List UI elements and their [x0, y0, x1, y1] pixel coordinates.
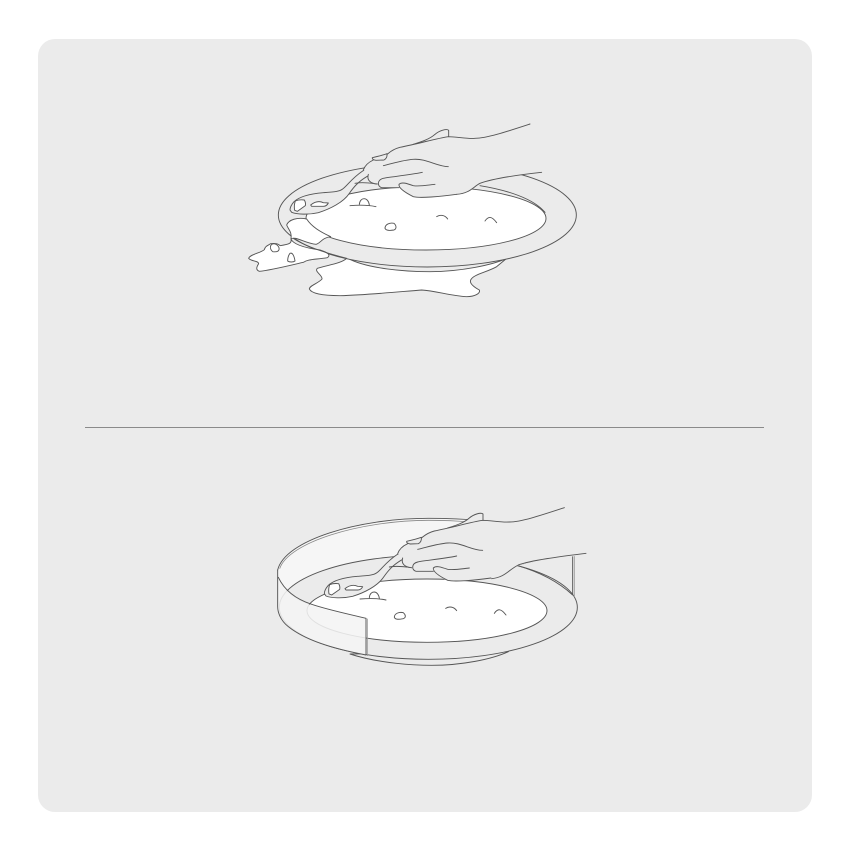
spilled food pieces: [270, 244, 279, 252]
guard top edge: [278, 518, 482, 570]
guard seam: [573, 556, 576, 597]
guard front outline: [278, 570, 366, 655]
illustration: spilling food on a plain plate: [249, 124, 576, 297]
inner rim highlight: [480, 186, 545, 212]
food piece: [385, 223, 396, 230]
guard back wall: [278, 518, 492, 595]
food arc: [437, 215, 448, 219]
lower rim edge: [293, 238, 347, 258]
plate base: [347, 258, 508, 272]
divider: [85, 426, 764, 428]
food piece: [394, 612, 405, 619]
guard front wall: [278, 570, 366, 655]
overflow on rim: [287, 218, 331, 244]
food bump: [350, 199, 376, 207]
guard edge end: [366, 619, 369, 656]
food arc: [485, 217, 497, 223]
sleeve line: [492, 553, 586, 579]
plate base: [350, 652, 508, 665]
guard front double edge: [278, 577, 366, 618]
plate well: [306, 187, 546, 250]
food arc: [494, 610, 506, 615]
spill on table: [309, 258, 507, 297]
guard right wall: [517, 555, 573, 595]
food bump: [360, 592, 386, 600]
plate rim: [278, 163, 576, 267]
food arc: [446, 607, 457, 611]
plate rim: [279, 555, 577, 659]
hand holding spoon: [290, 124, 542, 214]
sleeve line: [457, 172, 542, 194]
left spill: [249, 239, 329, 271]
plate well: [307, 579, 547, 642]
hand holding spoon: [324, 508, 576, 598]
illustration: plate with guard: [278, 508, 586, 665]
sleeve: [485, 530, 565, 579]
